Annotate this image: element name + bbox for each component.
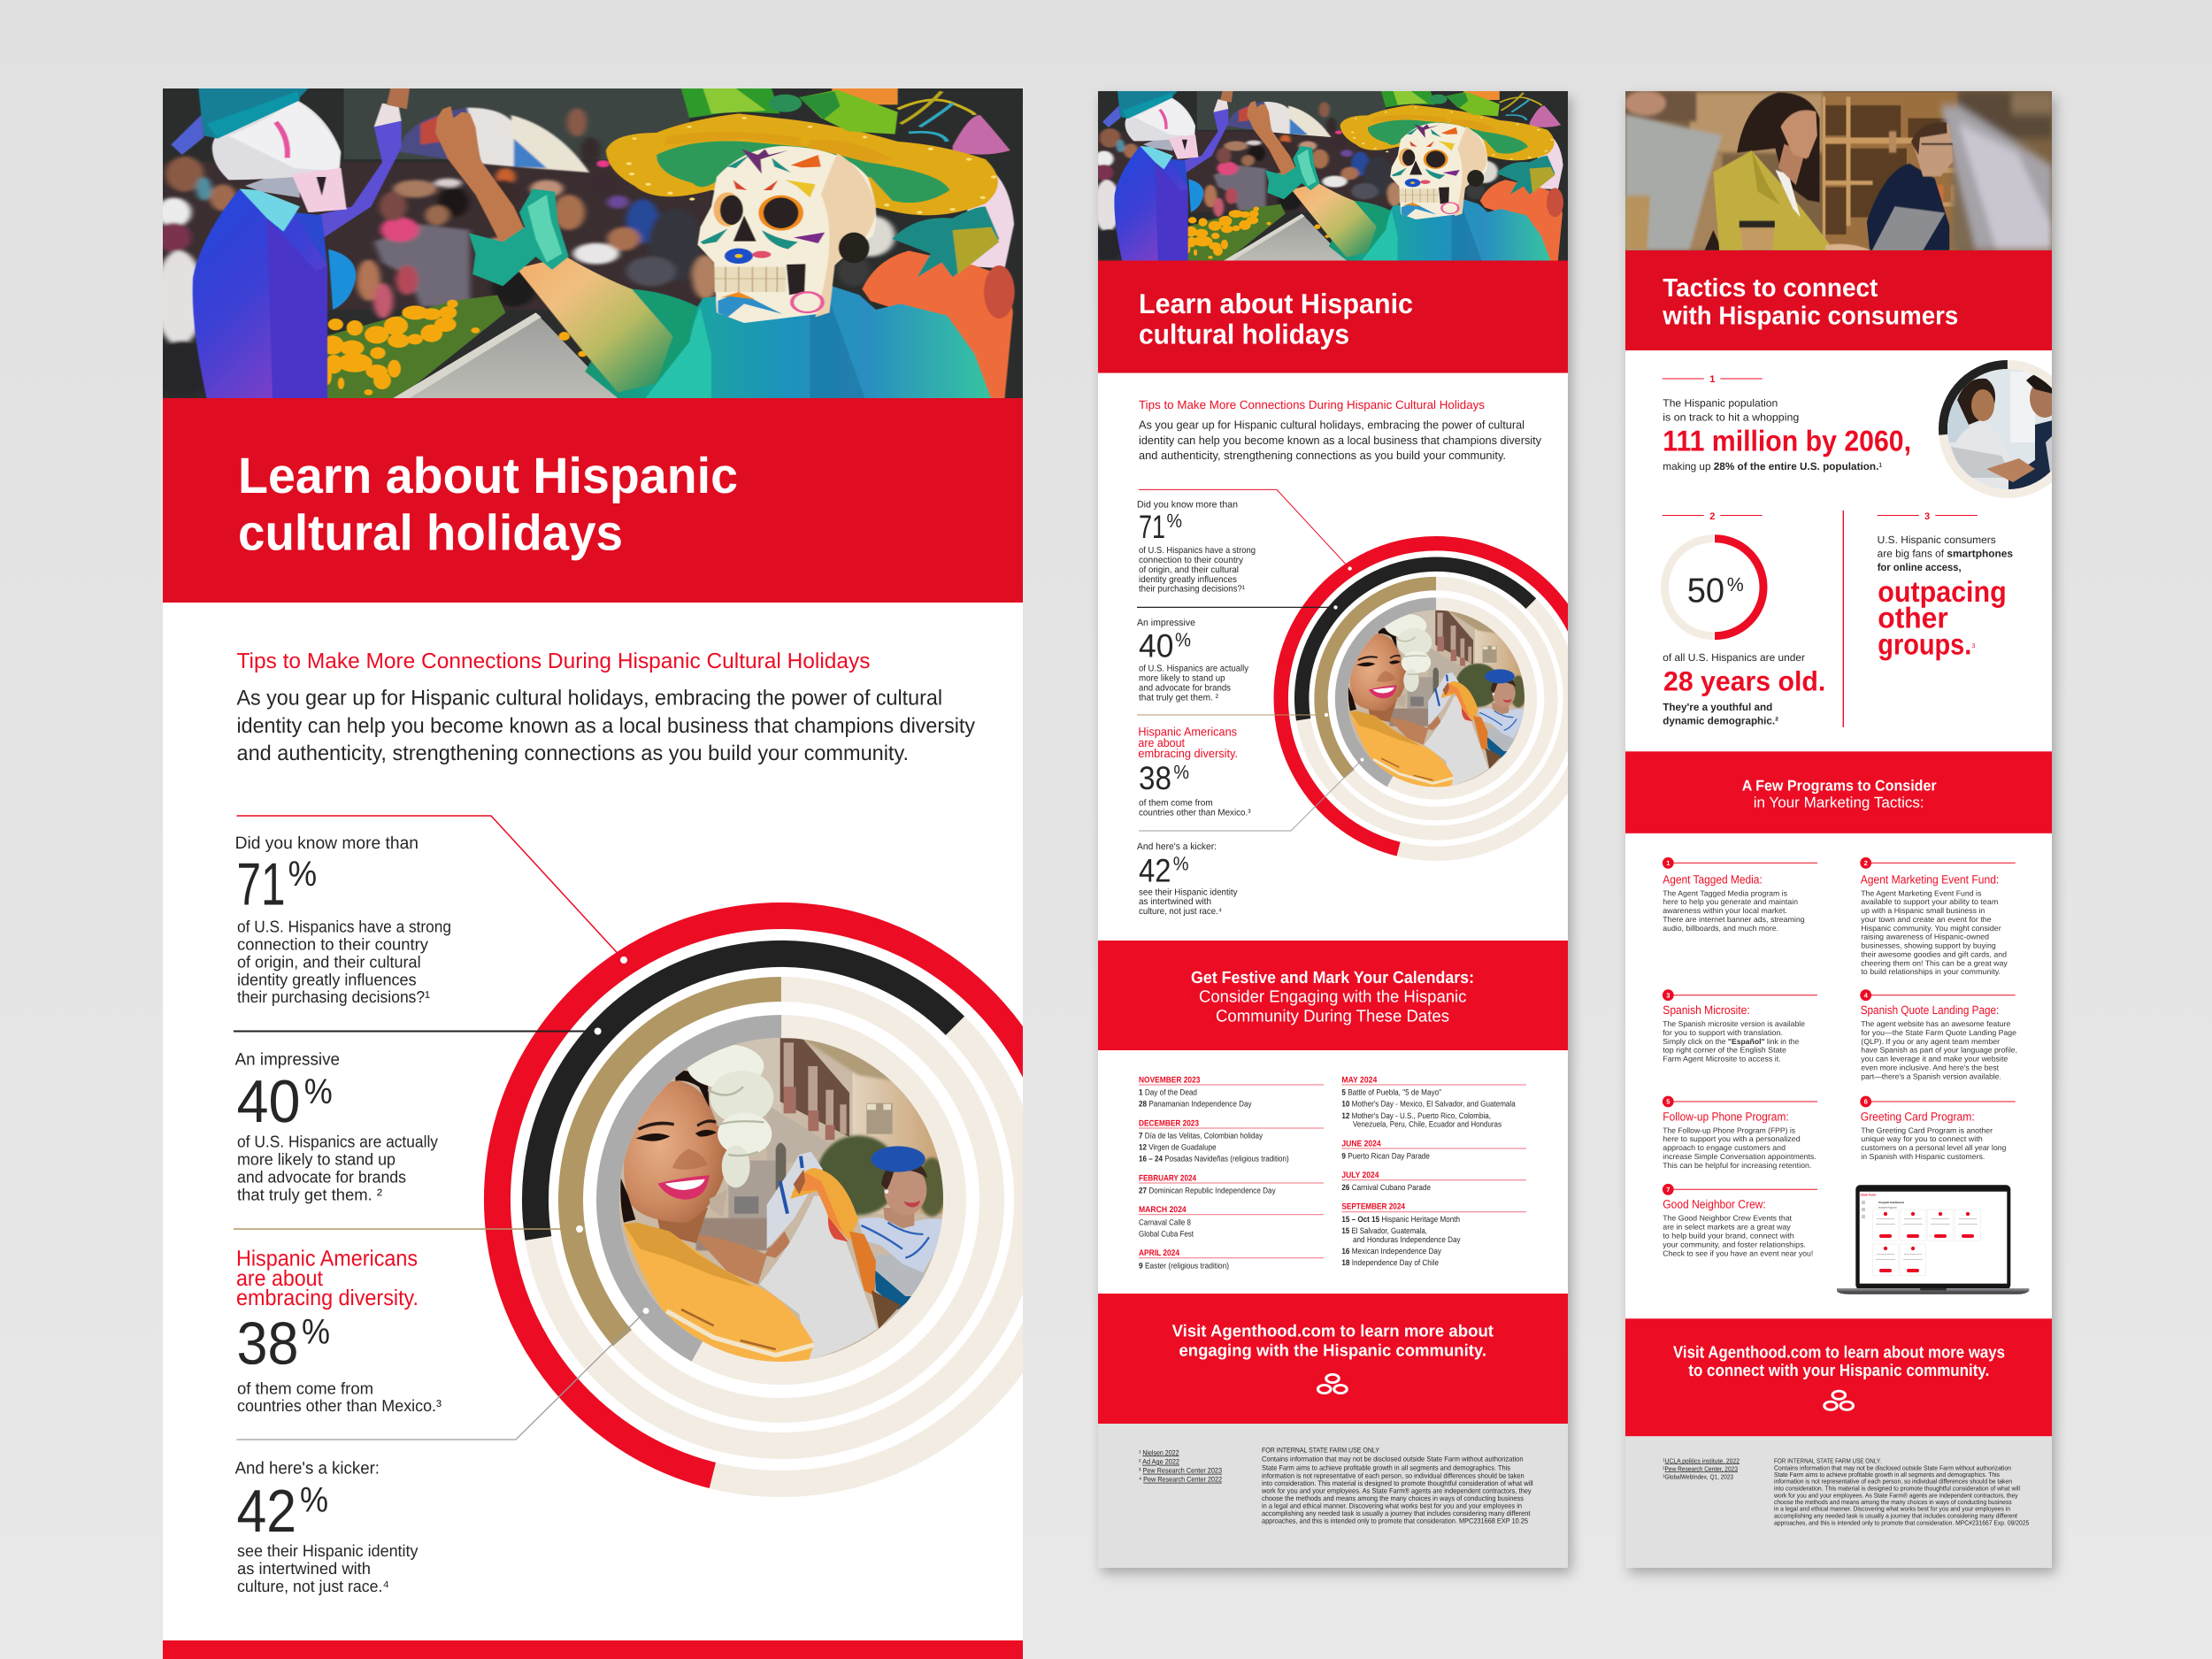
banner: visit Agenthood (1625, 1318, 2052, 1436)
program 2: to build relationships in your community. (1861, 967, 2001, 976)
stat: 71%: identity greatly influences (1139, 575, 1237, 585)
stat: 42% (1137, 841, 1238, 917)
stat: 71%: Did you know more than (1137, 499, 1238, 510)
stat: 71% (235, 833, 451, 1006)
laptop mockup (1837, 1185, 2029, 1294)
stat: 71%: 71 (237, 851, 285, 918)
calendar: right column: 5 Battle of Puebla, "5 de Mayo" (1341, 1088, 1441, 1097)
program 7: The Good Neighbor Crew Events that (1663, 1214, 1793, 1223)
footer: sources and legal: State Farm aims to achieve profitable growth in all segments and demographics. This (1774, 1471, 2000, 1479)
footer: sources and legal: ¹ Nielsen 2022 (1139, 1448, 1179, 1456)
program 6: customers on a personal level all year long (1861, 1143, 2007, 1152)
banner: programs: in Your Marketing Tactics: (1754, 795, 1924, 811)
footer: sources and legal: ³GlobalWebIndex, Q1, 2023 (1663, 1473, 1733, 1481)
stat: 42%: culture, not just race.⁴ (237, 1577, 389, 1595)
calendar: right column (1341, 1075, 1526, 1267)
stat 1: population: 111 million by 2060, (1663, 424, 1911, 457)
banner: calendars: Consider Engaging with the Hispanic (1199, 988, 1466, 1007)
stat: 40%: that truly get them. ² (237, 1185, 382, 1203)
icon: three ovals logo (1317, 1373, 1348, 1394)
stat: 42%: % (1173, 853, 1189, 875)
program 4: even more inclusive. And here's the best (1861, 1064, 2000, 1072)
stat 1: population: making up 28% of the entire U.S. population.¹ (1663, 460, 1882, 472)
footer: sources and legal: State Farm aims to achieve profitable growth in all segments and demographics. This (1262, 1464, 1510, 1472)
program 7: to help build your brand, connect with (1663, 1232, 1794, 1240)
calendar: left column (1139, 1075, 1324, 1270)
panel: cultural holidays sheet (1098, 91, 1568, 1568)
program 4: part—there's a Spanish version available. (1861, 1071, 2001, 1080)
stat: 40%: An impressive (235, 1049, 340, 1069)
panel: tactics sheet (1624, 90, 2079, 1568)
footer band (163, 1640, 1023, 1659)
banner: calendars (1098, 941, 1568, 1050)
title: with Hispanic consumers (1662, 302, 1958, 330)
stat: 71%: their purchasing decisions?¹ (237, 987, 430, 1006)
program 1: Agent Tagged Media: (1663, 872, 1763, 886)
banner: programs: A Few Programs to Consider (1742, 777, 1937, 794)
stat: 38%: 38 (1139, 760, 1171, 796)
program 5: The Follow-up Phone Program (FPP) is (1663, 1125, 1795, 1134)
calendar: right column: 18 Independence Day of Chile (1341, 1258, 1439, 1267)
subheading: Tips to Make More Connections During Hispanic Cultural Holidays (1139, 398, 1485, 411)
stat: 71% (1137, 499, 1256, 595)
program 1: awareness within your local market. (1663, 906, 1787, 915)
program 4: The agent website has an awesome feature (1861, 1019, 2011, 1028)
calendar: left column: NOVEMBER 2023 (1139, 1075, 1200, 1085)
program 2: 2 (1864, 859, 1868, 867)
leader line: 71% (237, 816, 627, 964)
program 7: Check to see if you have an event near you! (1663, 1248, 1813, 1257)
intro text: identity can help you become known as a local business that champions diversity (237, 714, 975, 738)
program 2: available to support your ability to team (1861, 897, 1998, 906)
stat: 40%: An impressive (1137, 618, 1195, 628)
footer: sources and legal: accomplishing any needed task is usually a journey that includes considering many different (1774, 1511, 2017, 1519)
program 6: Greeting Card Program: (1861, 1110, 1975, 1123)
stat 2: youth donut (1663, 511, 1825, 727)
program 5: This can be helpful for increasing retention. (1663, 1161, 1811, 1170)
laptop mockup: Available Programs (1878, 1207, 1897, 1209)
program 4: Spanish Quote Landing Page: (1861, 1003, 1999, 1017)
program 1: The Agent Tagged Media program is (1663, 888, 1787, 897)
stat 3: smartphones: for online access, (1878, 561, 1962, 573)
title (1139, 288, 1413, 350)
program 3: Farm Agent Microsite to access it. (1663, 1055, 1781, 1064)
program 1: 1 (1666, 859, 1670, 867)
program 2 (1860, 857, 2016, 976)
program 2: Hispanic community. You might consider (1861, 924, 2001, 933)
banner: calendars: Community During These Dates (1216, 1008, 1449, 1026)
panel: large poster detail (163, 88, 1023, 1659)
stat: 40% (235, 1049, 439, 1203)
footer: sources and legal: work for you and your employees. As State Farm® agents are independent contractors, they (1773, 1491, 2018, 1499)
stat 1: population: The Hispanic population (1663, 396, 1778, 409)
stat: 71%: of U.S. Hispanics have a strong (1139, 546, 1256, 556)
program 5: Follow-up Phone Program: (1663, 1110, 1789, 1123)
banner: visit Agenthood: Visit Agenthood.com to learn about more ways (1673, 1343, 2005, 1362)
program 1: here to help you generate and maintain (1663, 897, 1798, 906)
footer: sources and legal: information is not representative of each person, so individual differences should be taken (1262, 1471, 1525, 1479)
footer: sources and legal: Contains information that may not be disclosed outside State Farm without authorization (1262, 1455, 1524, 1463)
program 7 (1663, 1184, 1817, 1257)
program 5: increase Simple Conversation appointments. (1663, 1152, 1816, 1161)
calendar: right column: 12 Mother's Day - U.S., Puerto Rico, Colombia, (1341, 1111, 1491, 1120)
program 2: your town and create an event for the (1861, 915, 1992, 924)
stat: 40%: 40 (1139, 628, 1173, 664)
stat: 38%: embracing diversity. (236, 1286, 419, 1310)
stat: 71%: of U.S. Hispanics have a strong (237, 918, 451, 936)
stat 3: smartphones: 3 (1971, 643, 1975, 649)
program 7: your community, and foster relationships. (1663, 1240, 1806, 1248)
stat: 40%: more likely to stand up (1139, 673, 1225, 683)
intro text (1139, 419, 1541, 462)
stat 2: youth donut: They're a youthful and (1663, 701, 1772, 713)
footer: sources and legal: approaches, and this is intended only to promote that consideration. MPC231668 EXP 10.25 (1262, 1517, 1528, 1525)
leader line: 71% (1139, 489, 1352, 571)
stat 1: population: 1 (1709, 374, 1715, 385)
title (238, 448, 738, 561)
program 6: in Spanish with Hispanic customers. (1861, 1152, 1985, 1161)
calendar: right column: 10 Mother's Day - Mexico, El Salvador, and Guatemala (1341, 1100, 1516, 1109)
banner: visit Agenthood: to connect with your Hispanic community. (1688, 1362, 1989, 1380)
intro text: identity can help you become known as a local business that champions diversity (1139, 434, 1541, 447)
stat: 71%: % (288, 855, 317, 894)
stat: 38%: are about (1138, 736, 1185, 749)
banner: programs (1625, 751, 2052, 833)
stat: 38%: of them come from (1139, 799, 1213, 809)
leader line: 42% (237, 1308, 649, 1440)
program 4: for you—the State Farm Quote Landing Page (1861, 1028, 2016, 1037)
stat: 38%: embracing diversity. (1138, 747, 1238, 760)
stat: 38%: Hispanic Americans (1138, 725, 1237, 738)
stat: 40%: that truly get them. ² (1139, 693, 1219, 703)
stat 3: smartphones (1878, 511, 2013, 660)
program 4 (1860, 989, 2017, 1080)
calendar: left column: 9 Easter (religious tradition) (1139, 1261, 1229, 1270)
footer: sources and legal: information is not representative of each person, so individual differences should be taken (1774, 1478, 2012, 1486)
leader line: 38% (1137, 713, 1328, 717)
stat: 40%: % (304, 1072, 333, 1111)
calendar: right column: 15 El Salvador, Guatemala, (1341, 1226, 1427, 1235)
stat: 38%: countries other than Mexico.³ (1139, 809, 1251, 818)
footer: sources and legal: ³ Pew Research Center 2023 (1139, 1467, 1222, 1475)
photo: smiling dancer (1346, 608, 1528, 790)
header banner (1625, 250, 2052, 350)
photo: smiling dancer (617, 1033, 949, 1367)
program 1 (1663, 857, 1817, 933)
stat: 42%: as intertwined with (237, 1559, 371, 1578)
stat: 40%: of U.S. Hispanics are actually (1139, 664, 1249, 673)
stat 3: smartphones: groups. (1878, 628, 1971, 660)
program 3: top right corner of the English State (1663, 1046, 1786, 1055)
intro text: and authenticity, strengthening connections as you build your community. (1139, 449, 1506, 462)
photo: Day of the Dead parade (1092, 91, 1568, 260)
footer: sources and legal: in a legal and ethical manner. Discovering what works best for you and your employees in (1774, 1505, 2010, 1513)
stat: 40%: and advocate for brands (237, 1168, 406, 1186)
stat: 71%: of origin, and their cultural (237, 952, 421, 971)
stat: 40%: % (1175, 628, 1191, 651)
footer: sources and legal: choose the methods and means among the many choices in ways of conducting business (1774, 1498, 2012, 1506)
panel shadow: cultural holidays sheet (1102, 97, 1571, 1573)
stat: 42%: And here's a kicker: (1137, 841, 1217, 852)
title: Learn about Hispanic (238, 448, 738, 504)
stat: 38% (236, 1246, 442, 1415)
stat 1: population: is on track to hit a whopping (1663, 411, 1799, 423)
program 2: cheering them on! This can be a great way (1861, 958, 2008, 967)
footer: sources and legal: in a legal and ethical manner. Discovering what works best for you and your employees in (1262, 1502, 1522, 1510)
program 3: for you to support with translation. (1663, 1028, 1783, 1037)
stat: 71%: connection to their country (237, 934, 429, 954)
calendar: left column: 7 Día de las Velitas, Colombian holiday (1139, 1131, 1263, 1140)
stat 2: youth donut: 28 years old. (1663, 666, 1825, 697)
program 6: unique way for you to connect with (1861, 1134, 1983, 1143)
header banner (163, 398, 1023, 603)
stat: 38%: % (1173, 761, 1189, 783)
program 7: Good Neighbor Crew: (1663, 1198, 1766, 1211)
calendar: right column: Venezuela, Peru, Chile, Ecuador and Honduras (1353, 1120, 1502, 1129)
calendar: left column: APRIL 2024 (1139, 1248, 1180, 1258)
stat: 38%: % (302, 1313, 330, 1352)
intro text (237, 687, 975, 765)
program 3: Simply click on the "Español" link in the (1663, 1037, 1800, 1046)
stat: 42%: see their Hispanic identity (237, 1541, 419, 1560)
laptop mockup: State Farm (1860, 1193, 1876, 1196)
leader line: 40% (234, 1028, 602, 1035)
stat: 38%: of them come from (237, 1379, 373, 1397)
calendar: left column: 16 – 24 Posadas Navideñas (religious tradition) (1139, 1155, 1289, 1164)
stat: 38%: 38 (237, 1310, 299, 1378)
program 2: businesses, showing support by buying (1861, 941, 1996, 950)
panel shadow: tactics sheet (1629, 97, 2055, 1573)
program 3: Spanish Microsite: (1663, 1003, 1750, 1017)
laptop mockup: Program Dashboard (1878, 1201, 1904, 1204)
leader line: 38% (234, 1225, 583, 1233)
banner: calendars: Get Festive and Mark Your Calendars: (1191, 969, 1474, 987)
program 2: Agent Marketing Event Fund: (1861, 872, 1999, 886)
calendar: right column: MAY 2024 (1341, 1075, 1378, 1085)
footer: sources and legal: work for you and your employees. As State Farm® agents are independent contractors, they (1261, 1486, 1532, 1494)
calendar: left column: Carnaval Calle 8 (1139, 1217, 1191, 1226)
stat 1: population (1663, 374, 1911, 472)
stat 2: youth donut: dynamic demographic.² (1663, 715, 1778, 727)
stat: 42%: see their Hispanic identity (1139, 888, 1238, 897)
stat: 42%: 42 (237, 1478, 296, 1545)
footer: sources and legal: ¹UCLA politics institute, 2022 (1663, 1456, 1740, 1464)
program 7: are in select markets are a great way (1663, 1223, 1791, 1232)
footer: sources and legal: ²Pew Research Center, 2023 (1663, 1464, 1738, 1472)
stat: 38%: are about (236, 1266, 323, 1291)
program 4: (QLP). If you or any agent team member (1861, 1037, 2000, 1046)
banner: visit Agenthood (1098, 1294, 1568, 1424)
calendar: right column: SEPTEMBER 2024 (1341, 1202, 1406, 1212)
program 2: The Agent Marketing Event Fund is (1861, 888, 1981, 897)
footer: sources and legal: ⁴ Pew Research Center 2022 (1139, 1476, 1222, 1484)
calendar: left column: 28 Panamanian Independence Day (1139, 1100, 1252, 1109)
stat: 40%: more likely to stand up (237, 1150, 396, 1169)
stat: 40%: of U.S. Hispanics are actually (237, 1133, 439, 1151)
banner: visit Agenthood: Visit Agenthood.com to learn more about (1172, 1322, 1494, 1340)
program 2: up with a Hispanic small business in (1861, 906, 1985, 915)
subheading: Tips to Make More Connections During Hispanic Cultural Holidays (237, 649, 871, 673)
stat 2: youth donut: 50 (1687, 572, 1724, 610)
stat: 38%: countries other than Mexico.³ (237, 1396, 442, 1415)
program 2: raising awareness of Hispanic-owned (1861, 933, 1989, 941)
stat 2: youth donut: of all U.S. Hispanics are under (1663, 651, 1805, 664)
footer: sources and legal (1098, 1424, 1568, 1568)
program 6: The Greeting Card Program is another (1861, 1125, 1993, 1134)
program 4: have Spanish as part of your language profile, (1861, 1046, 2017, 1055)
program 7: 7 (1666, 1186, 1670, 1194)
footer: sources and legal: FOR INTERNAL STATE FARM USE ONLY. (1774, 1456, 1881, 1464)
leader line: 40% (1137, 605, 1338, 610)
leader line: 42% (1139, 758, 1364, 831)
footer: sources and legal: accomplishing any needed task is usually a journey that includes considering many different (1262, 1509, 1531, 1517)
program 6 (1860, 1096, 2016, 1161)
program 5: 5 (1666, 1098, 1670, 1106)
stat: 42%: culture, not just race.⁴ (1139, 907, 1222, 917)
icon: three ovals logo (1823, 1390, 1855, 1411)
calendar: left column: MARCH 2024 (1139, 1205, 1187, 1215)
program 3: 3 (1666, 991, 1670, 999)
ring with photo: woman with tablet and man (1938, 359, 2079, 499)
program 5: approach to engage customers and (1663, 1143, 1786, 1152)
stat 2: youth donut: 2 (1709, 511, 1715, 522)
calendar: right column: 16 Mexican Independence Day (1341, 1247, 1441, 1256)
stat: 42%: 42 (1139, 852, 1171, 888)
ring chart (483, 902, 1023, 1497)
program 2: their awesome goodies and gift cards, and (1861, 949, 2007, 958)
stat: 42%: And here's a kicker: (235, 1458, 380, 1478)
stat 3: smartphones: outpacing (1878, 575, 2007, 608)
program 3: The Spanish microsite version is available (1663, 1019, 1805, 1028)
footer: sources and legal: FOR INTERNAL STATE FARM USE ONLY (1262, 1446, 1380, 1454)
banner: visit Agenthood: engaging with the Hispanic community. (1179, 1342, 1486, 1361)
stat 3: smartphones: U.S. Hispanic consumers (1878, 534, 1996, 546)
footer: sources and legal (1625, 1436, 2052, 1568)
calendar: left column: 27 Dominican Republic Independence Day (1139, 1187, 1276, 1195)
calendar: right column: and Honduras Independence Day (1353, 1235, 1461, 1244)
intro text: and authenticity, strengthening connections as you build your community. (237, 741, 909, 765)
calendar: left column: DECEMBER 2023 (1139, 1118, 1199, 1128)
title: Tactics to connect (1663, 274, 1878, 303)
footer: sources and legal: into consideration. This material is designed to promote thoughtful consideration of what will (1774, 1484, 2020, 1492)
calendar: right column: 9 Puerto Rican Day Parade (1341, 1151, 1430, 1160)
program 5: here to support you with a personalized (1663, 1134, 1801, 1143)
stat 3: smartphones: other (1878, 601, 1948, 634)
program 5 (1663, 1096, 1817, 1170)
stat: 38% (1138, 725, 1251, 818)
stat: 40%: 40 (237, 1068, 301, 1135)
title: Learn about Hispanic (1139, 288, 1413, 319)
calendar: right column: 15 – Oct 15 Hispanic Heritage Month (1341, 1215, 1460, 1224)
stat: 38%: Hispanic Americans (236, 1246, 418, 1271)
footer: sources and legal: into consideration. This material is designed to promote thoughtful consideration of what will (1262, 1479, 1533, 1487)
stat: 71%: Did you know more than (235, 833, 419, 853)
stat: 71%: identity greatly influences (237, 970, 417, 988)
program 4: 4 (1864, 991, 1869, 999)
program 4: you can leverage it and make your website (1861, 1055, 2008, 1064)
program 1: There are internet banner ads, streaming (1663, 915, 1805, 924)
intro text: As you gear up for Hispanic cultural holidays, embracing the power of cultural (237, 687, 942, 710)
stat: 40% (1137, 618, 1249, 703)
stat 3: smartphones: 3 (1924, 511, 1930, 522)
divider (1843, 511, 1844, 727)
calendar: right column: JULY 2024 (1341, 1171, 1379, 1180)
intro text: As you gear up for Hispanic cultural holidays, embracing the power of cultural (1139, 419, 1525, 432)
footer: sources and legal: choose the methods and means among the many choices in ways of conducting business (1262, 1494, 1524, 1502)
stat: 71%: of origin, and their cultural (1139, 565, 1239, 575)
stat: 71%: their purchasing decisions?¹ (1139, 584, 1246, 595)
calendar: left column: FEBRUARY 2024 (1139, 1173, 1197, 1183)
stat: 71%: 71 (1139, 509, 1165, 545)
stat: 42% (235, 1458, 419, 1595)
stat 3: smartphones: are big fans of smartphones (1878, 547, 2013, 559)
stat: 71%: % (1166, 510, 1182, 532)
program 6: 6 (1864, 1098, 1868, 1106)
photo: Day of the Dead parade (152, 88, 1023, 398)
footer: sources and legal: ² Ad Age 2022 (1139, 1458, 1179, 1466)
stat: 71%: connection to their country (1139, 556, 1244, 565)
calendar: right column: 26 Carnival Cubano Parade (1341, 1183, 1431, 1192)
program 1: audio, billboards, and much more. (1663, 924, 1778, 933)
stat 2: youth donut: % (1727, 573, 1744, 595)
title: cultural holidays (238, 504, 623, 561)
title: cultural holidays (1139, 319, 1349, 350)
calendar: right column: JUNE 2024 (1341, 1139, 1381, 1148)
program 3 (1663, 989, 1817, 1064)
ring chart (1274, 536, 1568, 861)
calendar: left column: Global Cuba Fest (1139, 1229, 1194, 1238)
footer: sources and legal: Contains information that may not be disclosed outside State Farm without authorization (1774, 1463, 2011, 1471)
photo: colleagues with laptops (1624, 90, 2052, 250)
stat: 42%: % (300, 1480, 328, 1519)
stat: 42%: as intertwined with (1139, 897, 1211, 907)
calendar: left column: 12 Virgen de Guadalupe (1139, 1143, 1217, 1152)
title (1662, 274, 1958, 330)
footer: sources and legal: approaches, and this is intended only to promote that consideration. MPC#231667 Exp. 09/2025 (1774, 1518, 2029, 1526)
header banner (1098, 260, 1568, 373)
stat: 40%: and advocate for brands (1139, 683, 1231, 693)
calendar: left column: 1 Day of the Dead (1139, 1088, 1197, 1097)
